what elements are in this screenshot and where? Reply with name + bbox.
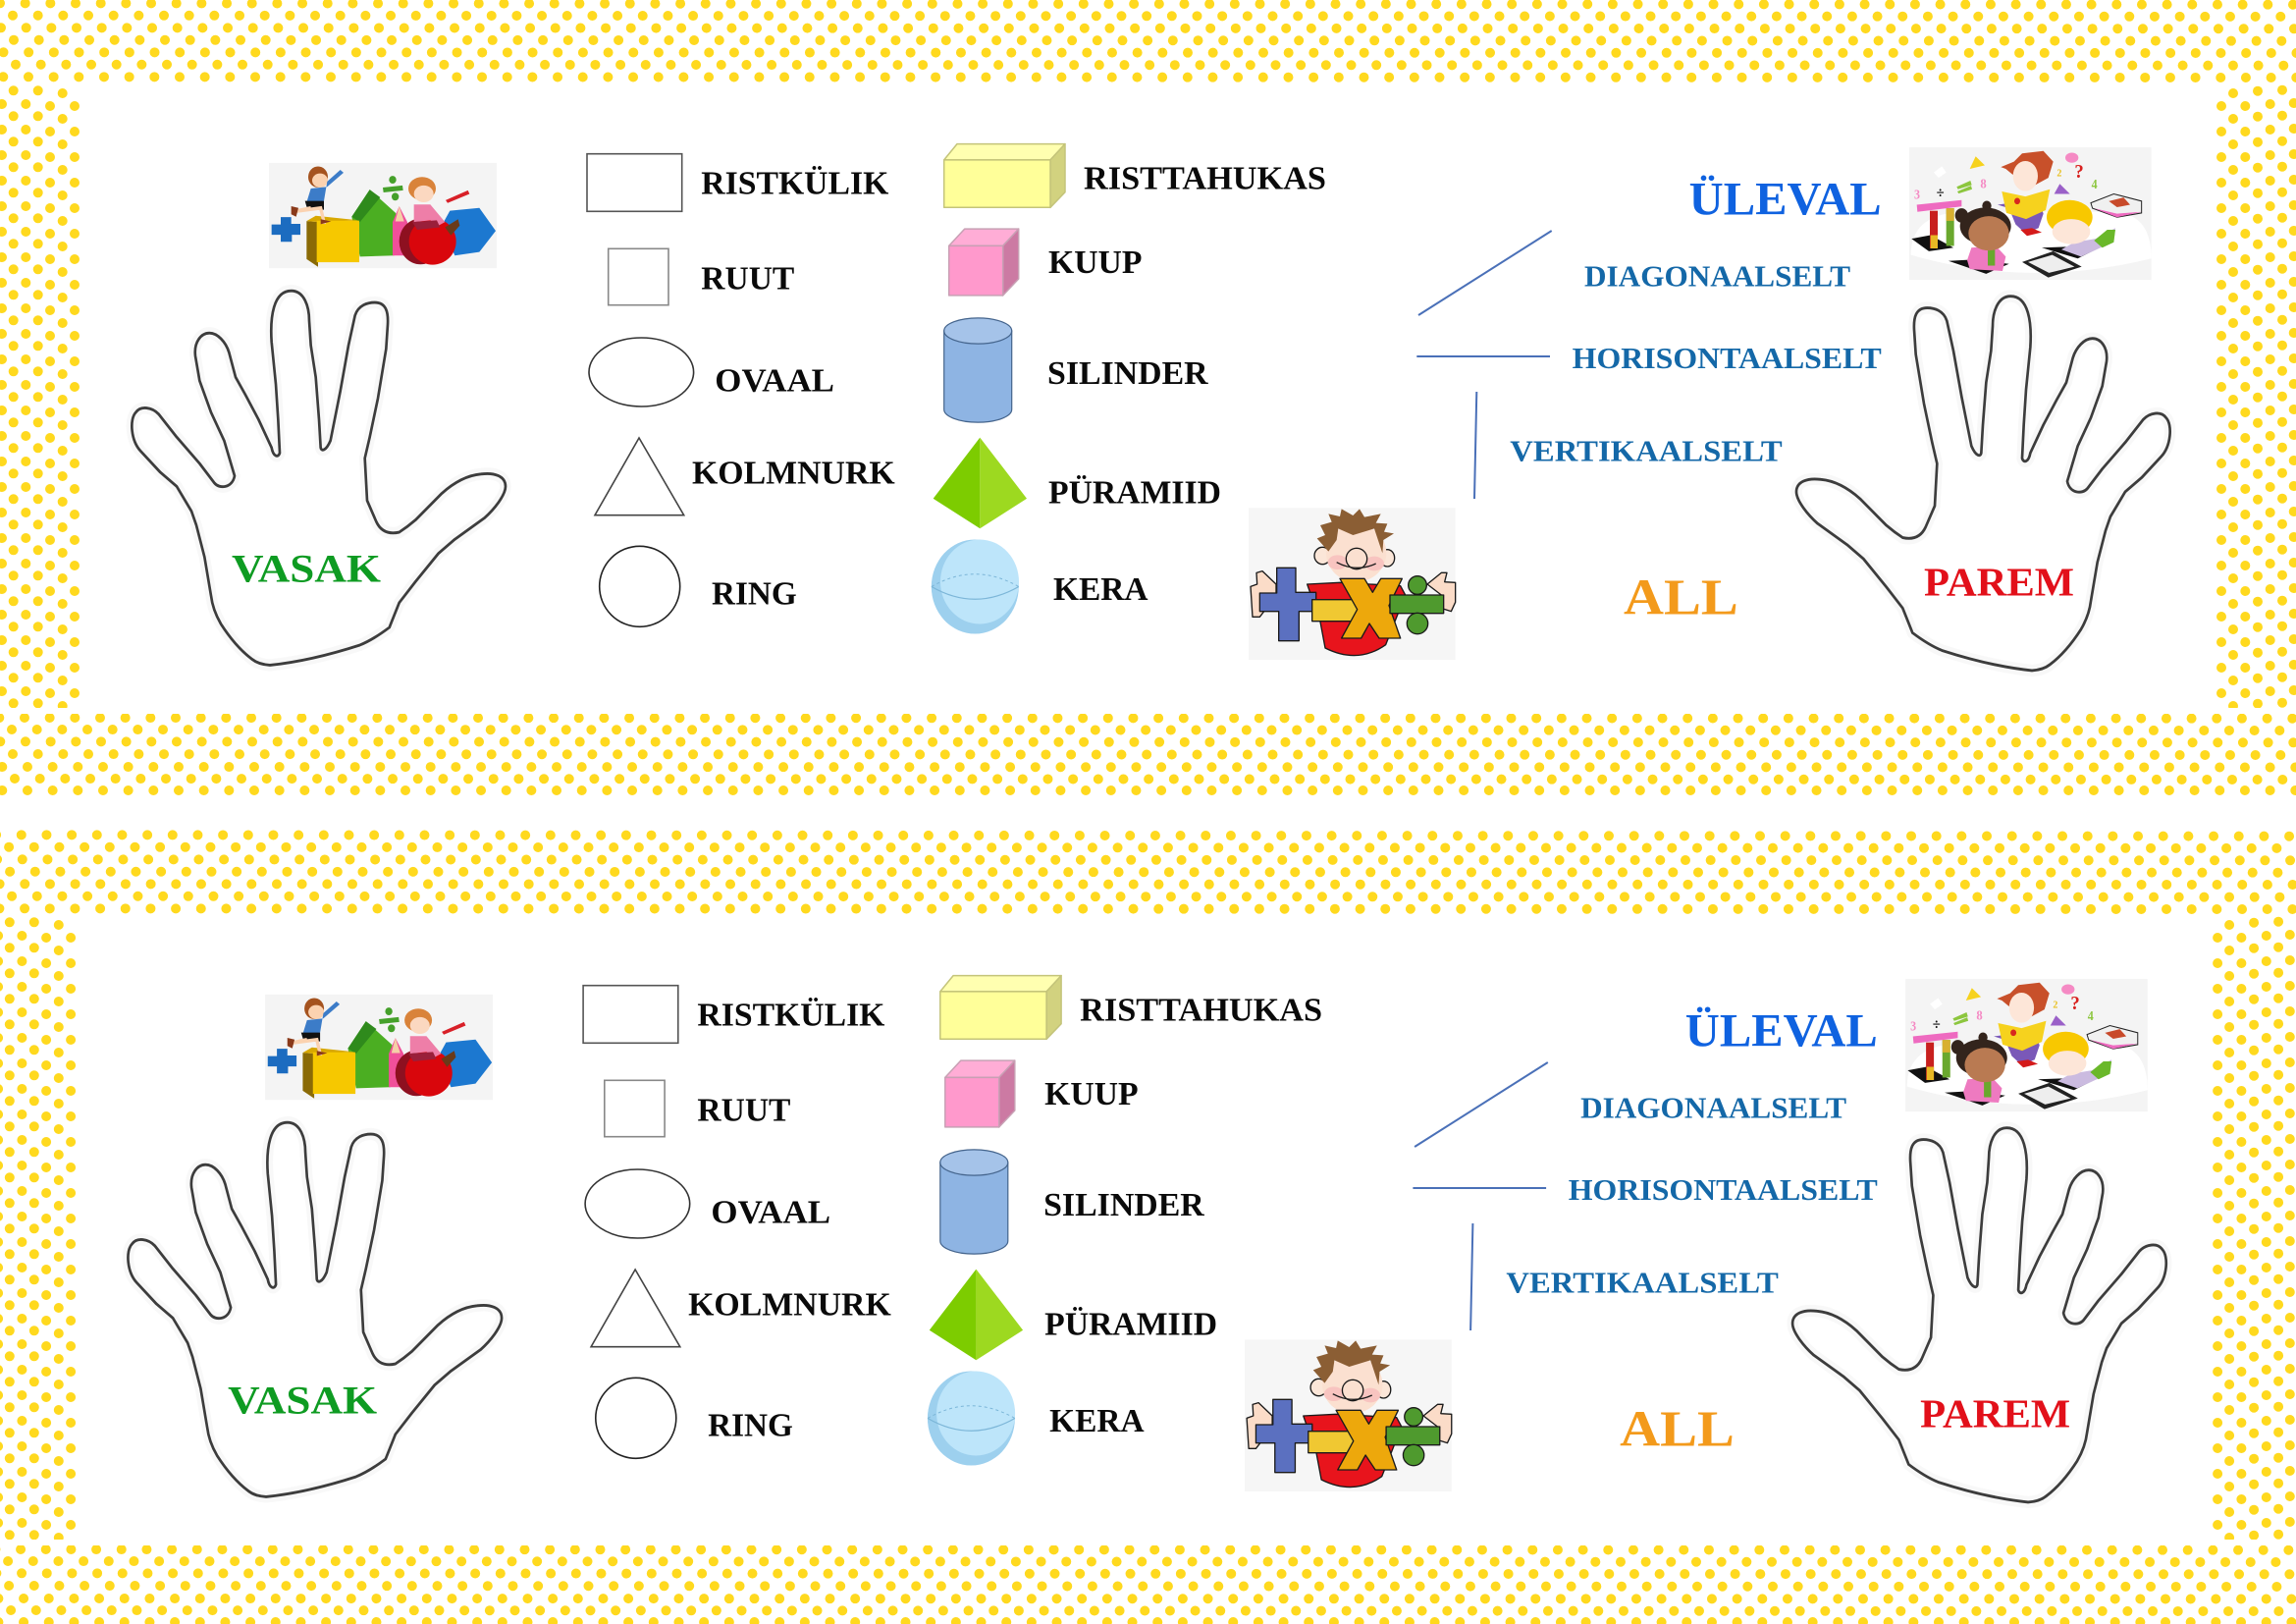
label: KOLMNURK: KOLMNURK	[688, 1287, 891, 1324]
arrow line: horizontal	[1413, 1187, 1546, 1189]
panel: top card	[0, 3, 2296, 790]
icon: circle	[596, 1378, 676, 1458]
label: KERA: KERA	[1049, 1403, 1145, 1439]
icon: pyramid	[934, 438, 1027, 528]
label: PAREM: PAREM	[1920, 1390, 2070, 1435]
icon: oval	[589, 338, 694, 406]
label: OVAAL: OVAAL	[711, 1194, 830, 1230]
arrow line: vertical	[1470, 1223, 1472, 1330]
arrow line: horizontal	[1416, 355, 1550, 357]
label: KOLMNURK: KOLMNURK	[692, 456, 895, 492]
icon: cube	[945, 1060, 1015, 1127]
polka dot border	[0, 3, 2296, 790]
label: HORISONTAALSELT: HORISONTAALSELT	[1573, 341, 1882, 375]
label: SILINDER: SILINDER	[1043, 1187, 1204, 1223]
icon: rectangle	[583, 986, 678, 1043]
icon: sphere	[932, 540, 1019, 634]
arrow line: diagonal	[1415, 1062, 1548, 1147]
arrow line: vertical	[1474, 392, 1476, 499]
label: ALL: ALL	[1624, 570, 1738, 626]
label: VASAK: VASAK	[232, 546, 381, 590]
icon: sphere	[928, 1371, 1015, 1465]
icon: right hand outline	[1792, 1128, 2166, 1502]
label: RUUT: RUUT	[701, 260, 795, 297]
icon: square	[605, 1080, 665, 1137]
illustration: boy with maths symbols	[1245, 1339, 1452, 1491]
label: SILINDER: SILINDER	[1047, 355, 1208, 392]
illustration: children reading	[1909, 147, 2152, 280]
panel: bottom card	[0, 835, 2296, 1622]
label: KUUP: KUUP	[1044, 1076, 1139, 1112]
illustration: children with geometric shapes	[269, 163, 497, 268]
label: RISTKÜLIK: RISTKÜLIK	[697, 997, 885, 1033]
label: ALL: ALL	[1620, 1402, 1735, 1458]
polka dot border	[0, 835, 2296, 1622]
label: ÜLEVAL: ÜLEVAL	[1689, 173, 1882, 225]
label: PAREM: PAREM	[1924, 559, 2074, 604]
icon: right hand outline	[1796, 297, 2170, 671]
illustration: children with geometric shapes	[265, 995, 493, 1100]
icon: pyramid	[930, 1270, 1023, 1360]
label: HORISONTAALSELT: HORISONTAALSELT	[1569, 1172, 1878, 1207]
label: VERTIKAALSELT: VERTIKAALSELT	[1506, 1265, 1779, 1299]
icon: cube	[949, 229, 1019, 296]
icon: cuboid	[940, 976, 1061, 1039]
icon: left hand outline	[128, 1122, 502, 1496]
icon: circle	[600, 546, 680, 626]
illustration: boy with maths symbols	[1249, 508, 1456, 660]
arrow line: diagonal	[1418, 231, 1552, 315]
label: RING: RING	[708, 1408, 793, 1444]
icon: rectangle	[587, 154, 682, 211]
label: KUUP: KUUP	[1048, 244, 1143, 281]
label: DIAGONAALSELT: DIAGONAALSELT	[1580, 1091, 1846, 1125]
label: PÜRAMIID: PÜRAMIID	[1048, 475, 1221, 511]
label: VERTIKAALSELT: VERTIKAALSELT	[1510, 433, 1783, 467]
label: RUUT: RUUT	[697, 1092, 791, 1128]
icon: cylinder	[944, 318, 1012, 422]
icon: triangle	[591, 1270, 680, 1347]
label: ÜLEVAL: ÜLEVAL	[1685, 1004, 1878, 1056]
label: OVAAL: OVAAL	[715, 362, 834, 399]
label: RISTTAHUKAS: RISTTAHUKAS	[1080, 992, 1322, 1028]
illustration: children reading	[1905, 979, 2148, 1111]
icon: cuboid	[944, 144, 1065, 207]
icon: cylinder	[940, 1150, 1008, 1254]
label: DIAGONAALSELT: DIAGONAALSELT	[1584, 259, 1850, 294]
label: RING: RING	[712, 576, 797, 613]
label: KERA: KERA	[1053, 571, 1148, 608]
icon: triangle	[595, 438, 684, 515]
icon: square	[609, 248, 668, 305]
label: PÜRAMIID: PÜRAMIID	[1044, 1306, 1217, 1343]
label: RISTKÜLIK: RISTKÜLIK	[701, 165, 889, 201]
icon: left hand outline	[132, 291, 506, 665]
icon: oval	[585, 1169, 690, 1238]
label: RISTTAHUKAS: RISTTAHUKAS	[1084, 160, 1326, 196]
label: VASAK: VASAK	[228, 1378, 377, 1422]
